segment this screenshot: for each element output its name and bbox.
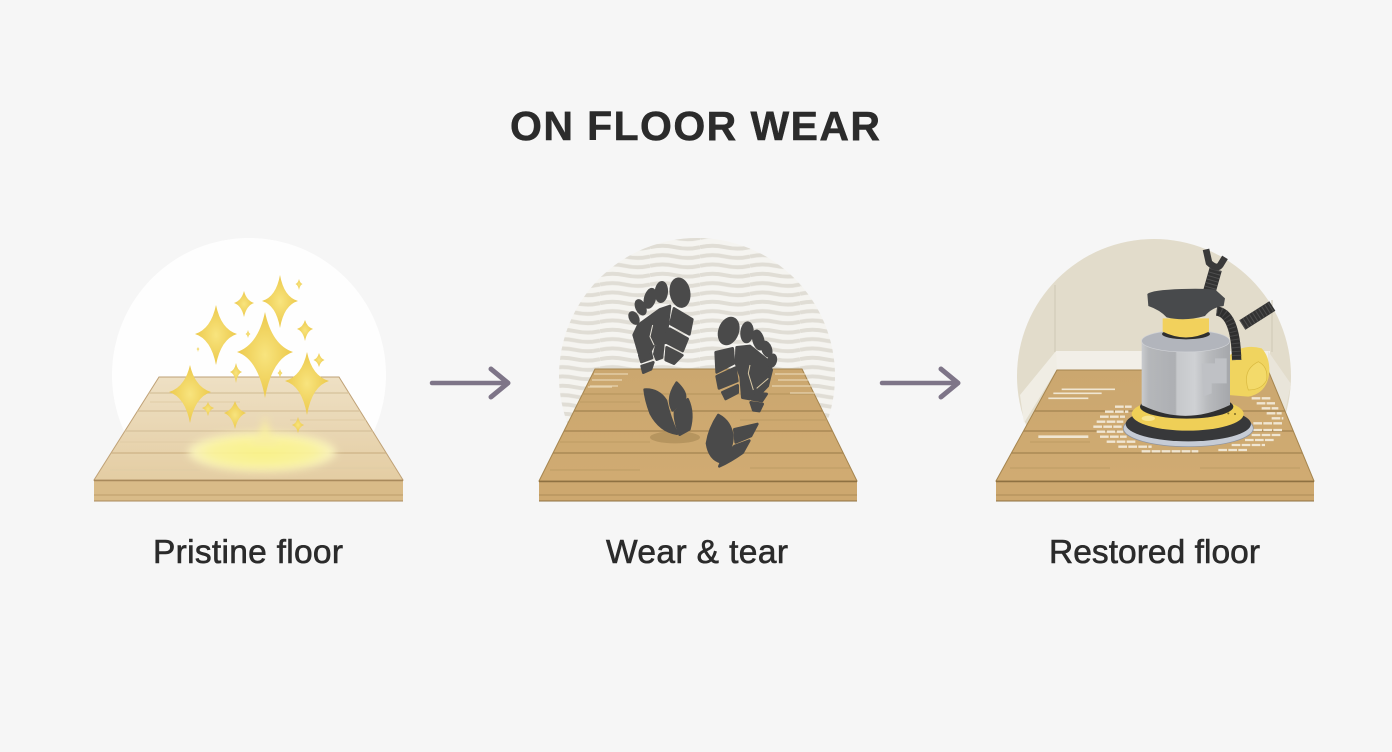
title: ON FLOOR WEAR bbox=[510, 103, 880, 149]
label: restored floor: Restored floor bbox=[1049, 534, 1260, 571]
vacuum body bbox=[1228, 347, 1269, 397]
label: pristine floor: Pristine floor bbox=[153, 534, 343, 571]
arrow: wear to restored bbox=[882, 369, 958, 397]
worn wooden floor bbox=[530, 369, 870, 501]
vacuum port neck and claw bbox=[1206, 249, 1225, 292]
shadow under heel bbox=[650, 431, 700, 443]
arrow: pristine to wear bbox=[432, 369, 508, 397]
sparkles bbox=[169, 275, 329, 433]
dirty footprints bbox=[628, 277, 777, 466]
wavy texture circle bbox=[559, 238, 835, 423]
white halo circle bbox=[112, 238, 386, 512]
pristine wooden floor bbox=[90, 377, 410, 501]
panel: restored floor bbox=[990, 239, 1320, 513]
heel print: right bbox=[707, 415, 757, 466]
label: wear and tear: Wear & tear bbox=[606, 534, 788, 571]
side hose bbox=[1242, 306, 1272, 325]
panel: wear and tear bbox=[538, 238, 858, 502]
footprint: right bbox=[716, 315, 777, 411]
sander head bbox=[1147, 289, 1225, 319]
yellow collar bbox=[1162, 318, 1210, 339]
sanding scuffs bbox=[1038, 389, 1283, 451]
steel canister bbox=[1142, 330, 1230, 416]
panel: pristine floor bbox=[93, 275, 404, 502]
room wall background bbox=[1017, 239, 1291, 425]
yellow glow on floor bbox=[188, 414, 336, 472]
dust hose bbox=[1217, 311, 1237, 360]
footprint: left bbox=[628, 277, 692, 373]
heel print: left bbox=[645, 383, 691, 435]
sander base bbox=[1123, 395, 1253, 447]
orbital floor sander bbox=[1123, 249, 1272, 447]
restored wooden floor bbox=[990, 370, 1320, 501]
